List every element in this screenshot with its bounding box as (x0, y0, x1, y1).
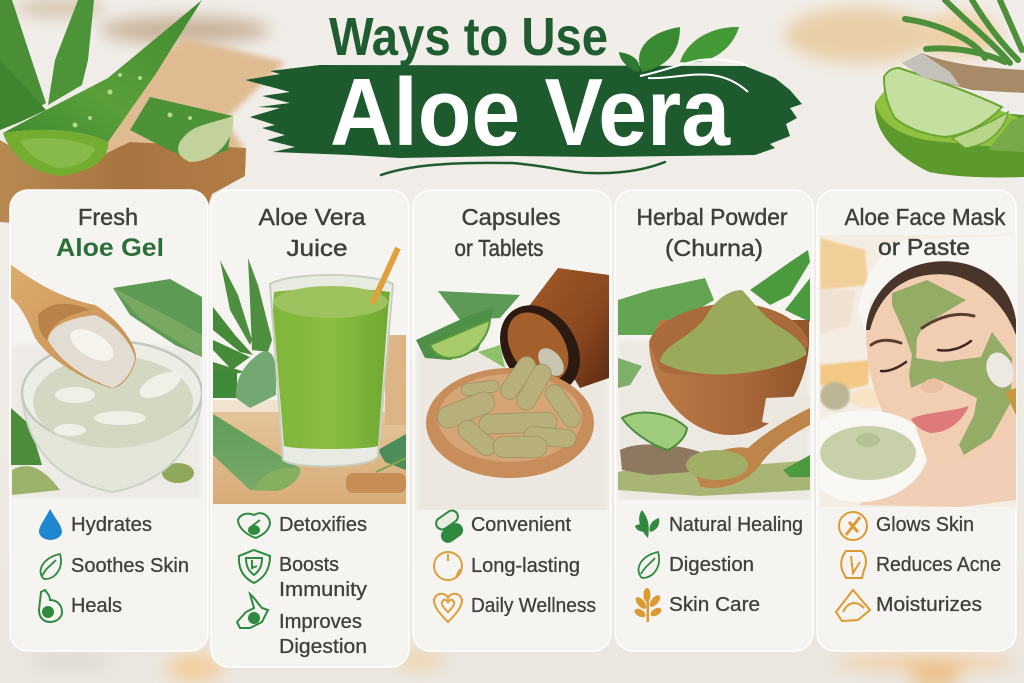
list: juice benefits: Boosts (279, 554, 339, 576)
list: mask benefits: Reduces Acne (876, 554, 1001, 576)
list: powder benefits: Digestion (669, 554, 754, 576)
list: gel benefits: Soothes Skin (71, 555, 189, 577)
icon: herb (635, 510, 659, 538)
photo: juice glass (213, 248, 406, 504)
heading: capsules or tablets: Capsules (462, 204, 560, 230)
heading: aloe vera juice: Juice (286, 235, 348, 261)
brush stroke (245, 65, 802, 158)
list: juice benefits: Digestion (279, 636, 367, 658)
photo: gel spoon and bowl (11, 265, 202, 515)
list: juice benefits: Improves (279, 611, 362, 633)
photo: aloe leaves on wooden board (0, 0, 285, 224)
list: mask benefits (836, 512, 1001, 621)
capsules (434, 353, 584, 459)
icon: detox (238, 513, 270, 538)
list: mask benefits: Glows Skin (876, 514, 974, 536)
list: gel benefits (39, 509, 189, 622)
panel: fresh aloe gel (10, 190, 208, 651)
heading: fresh aloe gel: Fresh (78, 204, 138, 230)
icon: healing hand (39, 590, 62, 622)
panel: capsules or tablets (413, 190, 611, 651)
icon: leaf (639, 552, 659, 578)
heading: aloe vera juice (258, 204, 366, 261)
heading: fresh aloe gel: Aloe Gel (56, 234, 164, 262)
photo: capsules and bottle (416, 268, 609, 520)
icon: clock (434, 552, 462, 580)
heading: aloe vera: Aloe Vera (330, 59, 731, 166)
icon: wheat sprig (633, 588, 663, 622)
panel: aloe vera juice (211, 190, 409, 667)
icon: leaf (41, 554, 61, 579)
list: powder benefits (633, 510, 803, 622)
decorative swoosh (381, 162, 665, 175)
heading: aloe face mask or paste: Aloe Face Mask (844, 204, 1006, 230)
panel: herbal powder (615, 190, 813, 651)
list: powder benefits: Skin Care (669, 594, 760, 616)
list: juice benefits: Immunity (279, 579, 367, 601)
list: powder benefits: Natural Healing (669, 514, 803, 536)
icon: leaves (619, 27, 748, 92)
heading: herbal powder churna: (Churna) (665, 235, 763, 261)
list: capsule benefits: Convenient (471, 514, 571, 536)
heading: herbal powder churna (636, 204, 788, 261)
list: capsule benefits: Long-lasting (471, 555, 580, 577)
list: gel benefits: Heals (71, 595, 122, 617)
panel: aloe face mask (817, 190, 1024, 651)
heading: aloe face mask or paste (844, 204, 1006, 260)
heading: herbal powder churna: Herbal Powder (636, 204, 788, 230)
photo: face with mask (820, 235, 1024, 507)
heading: fresh aloe gel (56, 204, 164, 262)
list: juice benefits: Detoxifies (279, 514, 367, 536)
list: capsule benefits: Daily Wellness (471, 595, 596, 617)
icon: moisture (836, 590, 870, 621)
list: mask benefits: Moisturizes (876, 594, 982, 616)
list: capsule benefits (434, 508, 596, 622)
list: gel benefits: Hydrates (71, 514, 152, 536)
icon: digestion hand (237, 594, 268, 628)
heading: capsules or tablets (454, 204, 560, 261)
icon: heart (434, 594, 462, 622)
heading: ways to use: Ways to Use (329, 7, 608, 67)
heading: aloe vera juice: Aloe Vera (258, 204, 366, 230)
icon: shield (239, 550, 270, 583)
title (245, 7, 802, 175)
list: juice benefits (237, 513, 367, 658)
icon: glow (839, 512, 867, 540)
icon: water drop (39, 509, 62, 540)
heading: capsules or tablets: or Tablets (454, 235, 544, 261)
heading: aloe face mask or paste: or Paste (878, 234, 970, 260)
photo: aloe slices in bowl (875, 0, 1024, 177)
icon: capsule (434, 508, 464, 544)
photo: powder bowl (618, 250, 810, 510)
icon: acne (841, 551, 866, 578)
